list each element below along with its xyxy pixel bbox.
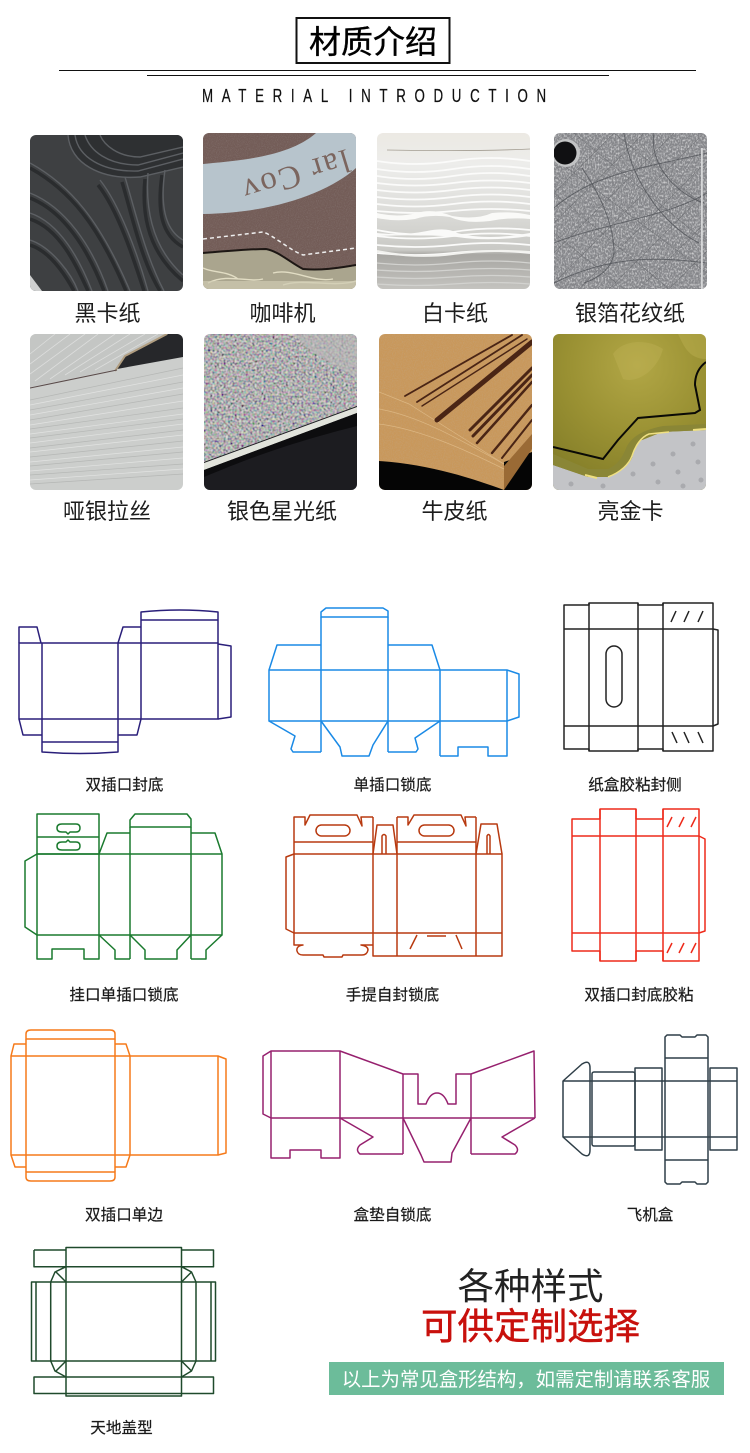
material labels: 哑银拉丝 <box>63 499 151 524</box>
note banner <box>329 1362 724 1395</box>
title: 材质介绍 <box>309 24 437 60</box>
material labels: 牛皮纸 <box>421 499 488 524</box>
photo: coffee paper <box>203 133 356 289</box>
material labels <box>63 301 685 524</box>
label: 盒垫自锁底 <box>354 1206 431 1224</box>
label: 挂口单插口锁底 <box>69 986 179 1004</box>
label: 纸盒胶粘封侧 <box>588 776 682 794</box>
photo: matte silver brushed paper <box>30 334 183 490</box>
label: 单插口锁底 <box>354 776 431 794</box>
diagram: double tuck single side <box>11 1030 226 1181</box>
photo: silver foil pattern paper <box>552 133 707 289</box>
diagram: double tuck bottom <box>19 610 231 754</box>
photo: black card paper <box>30 135 183 291</box>
material labels: 咖啡机 <box>249 301 316 326</box>
diagram: lid and base box <box>32 1248 216 1396</box>
label: 手提自封锁底 <box>346 986 439 1004</box>
material labels: 亮金卡 <box>597 499 664 524</box>
material labels: 银色星光纸 <box>227 499 337 524</box>
diagram: tray self-lock bottom <box>263 1051 535 1162</box>
material labels: 银箔花纹纸 <box>575 301 685 326</box>
material labels: 白卡纸 <box>422 301 488 326</box>
label: 飞机盒 <box>627 1206 674 1224</box>
photo: coffee paper: lar Cov <box>236 141 354 209</box>
title <box>296 18 450 63</box>
callout highlight: 可供定制选择 <box>421 1306 640 1347</box>
photo: kraft paper <box>379 334 532 490</box>
label: 双插口封底胶粘 <box>584 986 694 1004</box>
note banner: 以上为常见盒形结构，如需定制请联系客服 <box>342 1369 710 1391</box>
header rules <box>59 70 696 76</box>
label: 双插口单边 <box>85 1206 163 1224</box>
label: 双插口封底 <box>86 776 163 794</box>
callout heading: 各种样式 <box>458 1266 604 1307</box>
diagram: hanging tab single tuck lock bottom <box>25 814 222 959</box>
label: 天地盖型 <box>90 1419 153 1437</box>
diagram: glued side seal box <box>564 603 718 751</box>
diagram: handle self-lock bottom <box>286 815 502 957</box>
diagram: single tuck lock bottom <box>269 608 519 756</box>
diagram: double tuck bottom glued <box>572 809 705 961</box>
photo: white card paper <box>377 133 530 289</box>
photo: silver starlight paper <box>204 334 357 490</box>
material labels: 黑卡纸 <box>74 301 141 326</box>
subtitle: MATERIAL INTRODUCTION <box>202 86 546 107</box>
diagram: airplane box <box>563 1035 737 1184</box>
photo: bright gold card <box>553 334 706 490</box>
